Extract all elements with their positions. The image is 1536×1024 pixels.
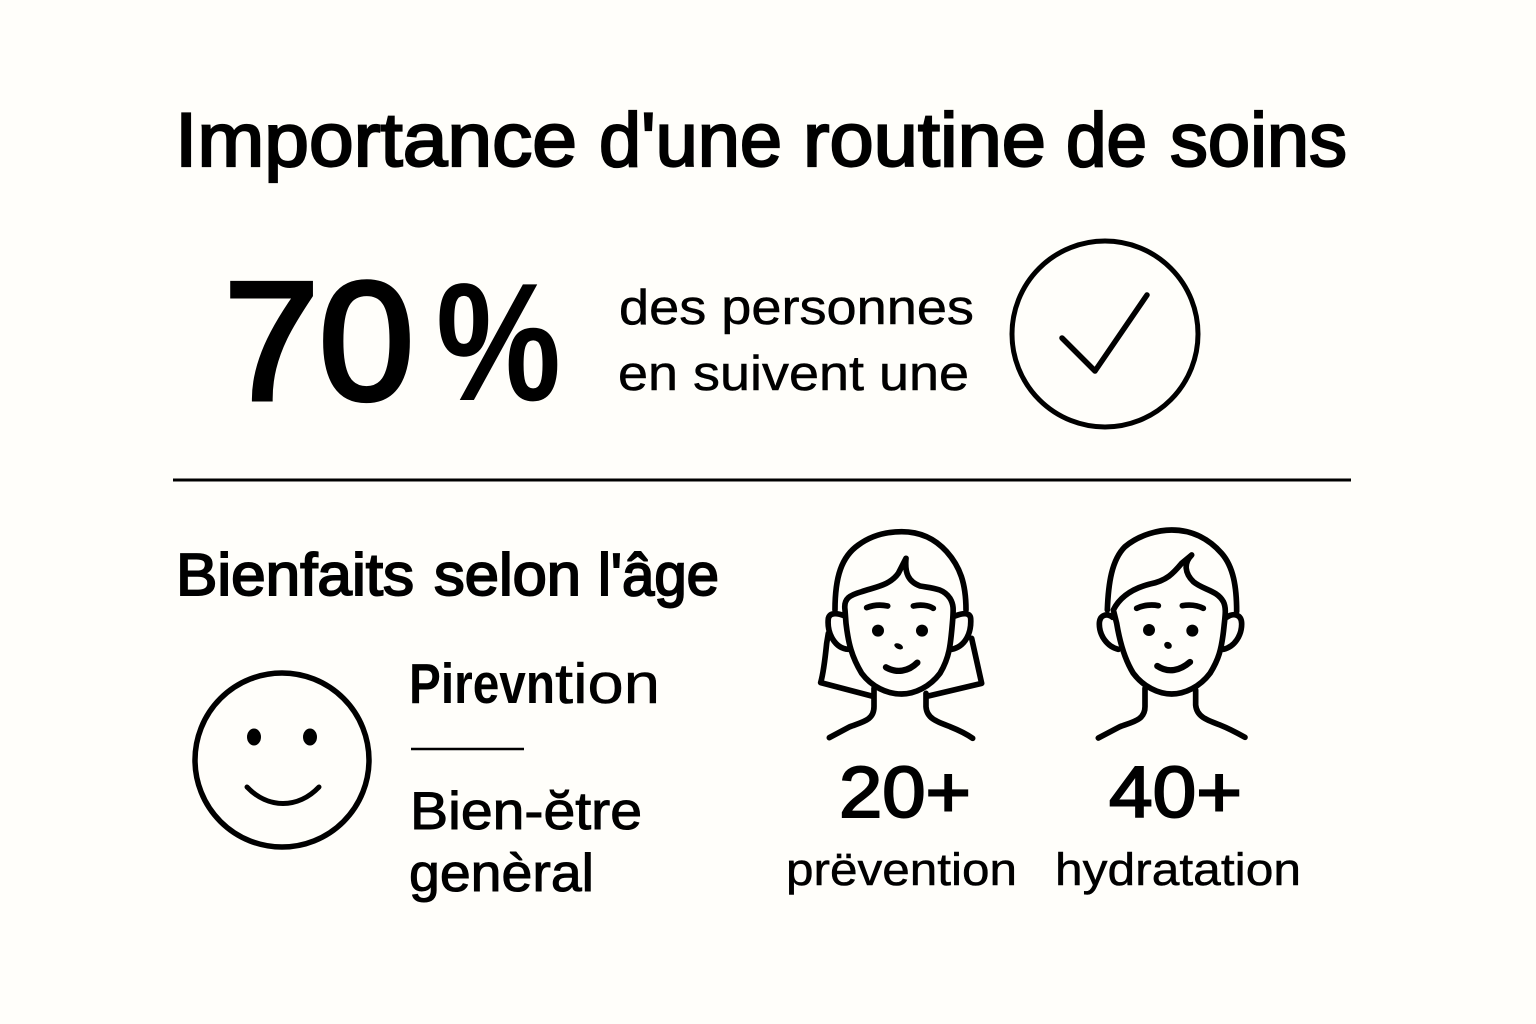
section heading: l'âge: [598, 542, 719, 608]
age label: 40+: 40+: [1109, 753, 1242, 833]
section heading: selon: [434, 542, 581, 608]
section heading: Bienfaits: [176, 542, 414, 608]
title: [175, 98, 1347, 183]
age label: 20+: 20+: [839, 753, 971, 833]
statistic: 70%: [224, 247, 561, 436]
benefit: general well-being: [409, 782, 642, 903]
statistic: 70%: %: [436, 248, 561, 436]
benefit: general well-being: Bien-ĕtre: [410, 782, 642, 841]
icon: check mark in circle: [1012, 241, 1198, 427]
icon: man face: [1098, 530, 1245, 738]
benefit: prevention: tion: [555, 652, 660, 716]
title: d'une: [599, 98, 782, 183]
benefit: prevention: Pirevn: [409, 652, 555, 716]
caption: prevention: prëvention: [786, 844, 1017, 895]
statistic description: [618, 281, 974, 401]
section heading: [176, 542, 719, 608]
statistic: 70%: 70: [224, 247, 414, 435]
benefit: prevention: [409, 652, 660, 716]
statistic description: des personnes: [619, 281, 974, 335]
icon: smiley face: [195, 673, 369, 847]
title: Importance: [175, 98, 577, 183]
benefit: general well-being: genèral: [409, 844, 594, 903]
caption: hydration: hydratation: [1055, 844, 1301, 895]
title: de: [1066, 98, 1147, 183]
title: routine: [803, 98, 1046, 183]
statistic description: en suivent une: [618, 347, 969, 401]
title: soins: [1170, 98, 1347, 183]
icon: woman face: [821, 532, 982, 738]
